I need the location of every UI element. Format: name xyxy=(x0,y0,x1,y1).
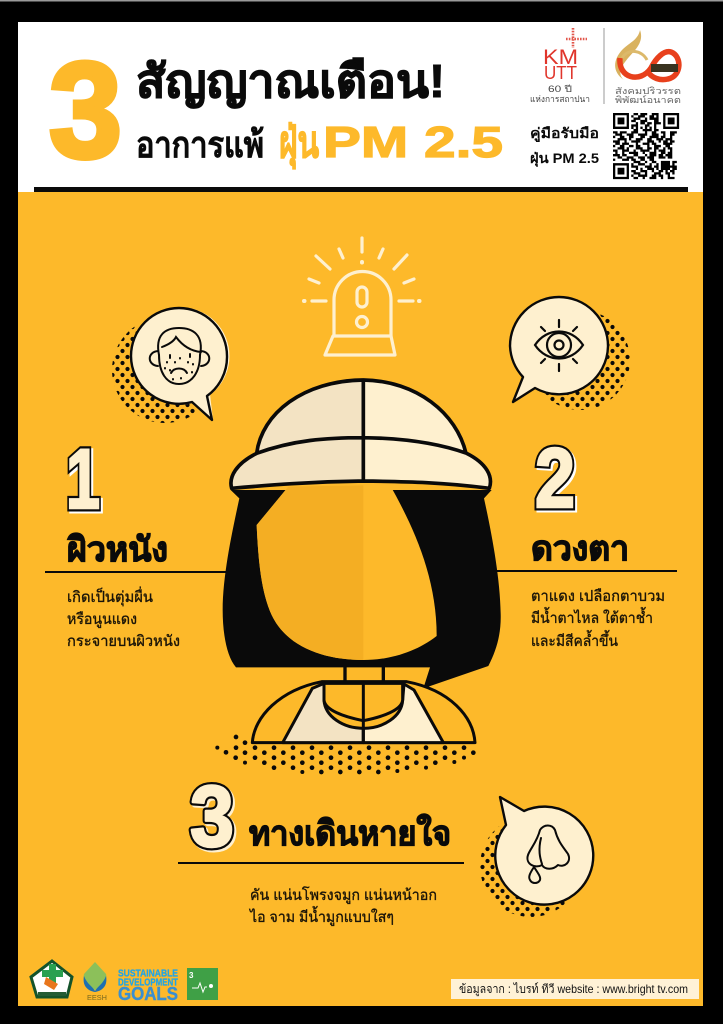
QR label: คู่มือรับมือ xyxy=(530,125,599,142)
speech bubble: nose xyxy=(480,797,593,917)
number 3: 3 xyxy=(190,769,234,865)
description xyxy=(531,588,665,650)
icon: face with rash xyxy=(150,328,209,384)
neck xyxy=(345,663,383,681)
description xyxy=(249,886,437,926)
title highlight xyxy=(279,118,503,170)
number 2: 2 xyxy=(537,433,577,527)
logo: sustainable development goals: DEVELOPMENT xyxy=(118,978,178,988)
title line 1: สัญญาณเตือน! xyxy=(136,55,445,108)
body and shirt xyxy=(252,682,475,743)
QR code xyxy=(613,114,678,178)
logo: health shield xyxy=(31,961,72,997)
icon: eye xyxy=(535,320,583,371)
source credit xyxy=(451,979,699,999)
description: ไอ จาม มีน้ำมูกแบบใสๆ xyxy=(249,906,394,926)
logo: KMUTT 60 years: KM xyxy=(543,46,578,69)
title line 2: อาการแพ้ xyxy=(136,124,264,165)
ground dots xyxy=(215,735,476,774)
description: คัน แน่นโพรงจมูก แน่นหน้าอก xyxy=(250,886,437,904)
face xyxy=(257,485,437,660)
logo: SDG goal 3 xyxy=(187,968,218,1000)
logo: 60th anniversary xyxy=(615,30,681,105)
speech bubble: eye xyxy=(510,297,630,410)
hair xyxy=(223,490,501,688)
logo: SDG goal 3: 3 xyxy=(189,971,194,980)
title highlight: PM 2.5 xyxy=(323,118,503,167)
logo: KMUTT 60 years xyxy=(530,28,590,104)
logo: KMUTT 60 years: แห่งการสถาปนา xyxy=(530,94,590,104)
speech bubble: skin xyxy=(112,308,230,423)
logo: sustainable development goals: SUSTAINABLE xyxy=(118,968,178,980)
icon: runny nose xyxy=(527,826,569,883)
number 3: 3 xyxy=(190,769,234,865)
description: ตาแดง เปลือกตาบวม xyxy=(531,588,665,605)
number 1: 1 xyxy=(66,432,100,526)
section 2: eyes xyxy=(497,431,677,650)
logo: KMUTT 60 years: UTT xyxy=(544,63,577,83)
description: และมีสีคล้ำขึ้น xyxy=(531,630,618,650)
header panel xyxy=(18,22,703,192)
heading: ผิวหนัง xyxy=(67,531,168,569)
QR label xyxy=(530,125,599,167)
logo: sustainable development goals: GOALS xyxy=(118,984,178,1004)
yellow main panel xyxy=(18,190,703,1006)
title highlight: ฝุ่น xyxy=(279,118,319,170)
QR label: ฝุ่น PM 2.5 xyxy=(530,150,599,167)
heading: ทางเดินหายใจ xyxy=(249,813,451,853)
header underline xyxy=(34,187,688,192)
description xyxy=(67,586,180,650)
number 2: 2 xyxy=(535,431,575,525)
logo: KMUTT 60 years: 60 ปี xyxy=(548,84,572,94)
footer logos xyxy=(31,961,218,1004)
section 3: airway xyxy=(178,769,464,926)
description: กระจายบนผิวหนัง xyxy=(67,633,180,650)
description: เกิดเป็นตุ่มผื่น xyxy=(67,586,153,607)
number 3: 3 xyxy=(192,771,236,867)
logo: EESH xyxy=(84,962,107,1002)
description: มีน้ำตาไหล ใต้ตาช้ำ xyxy=(531,607,653,627)
icon: alarm siren xyxy=(304,238,420,355)
big number 3: 3 xyxy=(49,34,122,186)
heading: ดวงตา xyxy=(531,530,629,568)
logo: EESH: EESH xyxy=(87,993,107,1002)
number 1: 1 xyxy=(66,432,100,526)
number 1: 1 xyxy=(68,434,102,528)
hat xyxy=(231,380,490,488)
logo: 60th anniversary: พิพัฒน์อนาคต xyxy=(615,94,681,105)
section 1: skin xyxy=(45,432,227,650)
source credit: ข้อมูลจาก : ไบรท์ ทีวี website : www.bright tv.com xyxy=(459,982,688,997)
logo: 60th anniversary: สังคมปริวรรต xyxy=(615,86,681,96)
logo: sustainable development goals xyxy=(118,968,178,1004)
number 2: 2 xyxy=(535,431,575,525)
description: หรือนูนแดง xyxy=(67,611,137,628)
main character xyxy=(215,380,501,774)
